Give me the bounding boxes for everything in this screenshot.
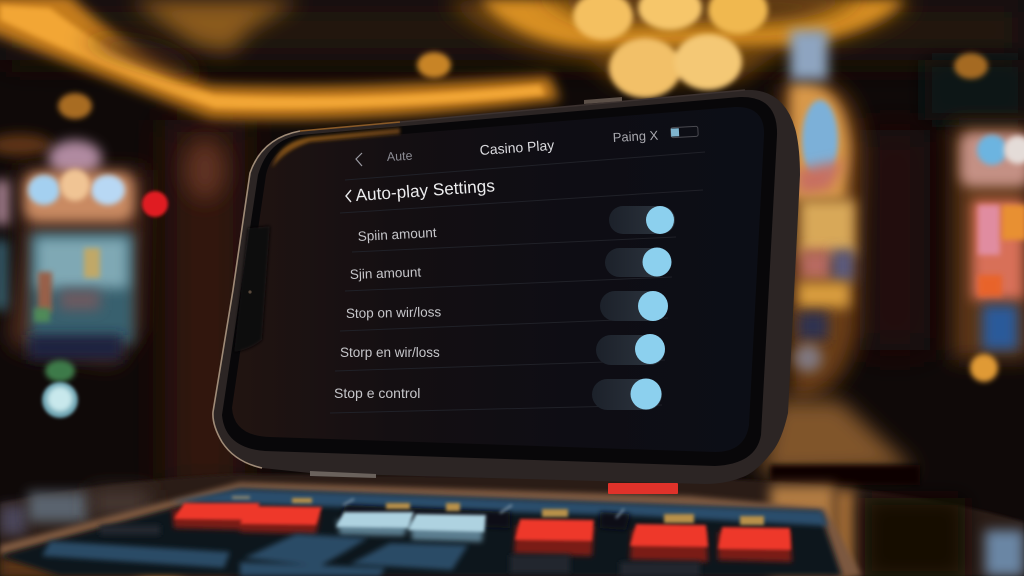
row 2: spin amount: Sjin amount	[350, 265, 422, 282]
row 5: stop control	[334, 378, 662, 410]
phone	[213, 90, 800, 494]
row 4: stop on win/loss: Storp en wir/loss	[340, 345, 440, 360]
row 4: stop on win/loss	[340, 334, 665, 365]
row 3: stop on win/loss: Stop on wir/loss	[346, 304, 442, 321]
status bar text	[356, 128, 659, 166]
ceiling gold band left	[0, 0, 560, 120]
keypad: red buttons	[172, 503, 792, 562]
ceiling gold chandelier	[450, 0, 915, 85]
keypad: faint dark labels	[100, 525, 700, 576]
table surface	[0, 474, 1024, 576]
phone body	[213, 90, 800, 484]
status bar text: Casino Play	[479, 137, 555, 158]
status bar text: Paing X	[612, 128, 659, 145]
slot machine left	[0, 140, 145, 365]
keypad: gold icons	[232, 496, 764, 525]
side ports and red button	[310, 471, 376, 478]
row 2: spin amount	[350, 248, 672, 282]
keypad: white buttons	[336, 512, 486, 542]
aisle floor	[760, 400, 915, 475]
row 3: stop on win/loss	[346, 291, 668, 321]
row 5: stop control: Stop e control	[334, 385, 420, 401]
keypad console	[0, 482, 862, 576]
screen corner glare	[272, 128, 400, 168]
keypad: light slash marks	[343, 499, 624, 518]
row 1: spin amount: Spiin amount	[357, 225, 437, 244]
status bar text: Aute	[386, 149, 413, 164]
inner black bezel	[222, 97, 777, 466]
ceiling lamps	[58, 52, 988, 119]
slot machine right of phone	[780, 30, 862, 400]
battery icon	[671, 126, 698, 138]
keypad: blue buttons	[42, 534, 468, 576]
divider lines	[330, 152, 705, 413]
notch	[234, 226, 270, 352]
slot machine far right	[952, 125, 1024, 360]
phone screen	[232, 107, 764, 452]
heading: Auto-play Settings	[355, 175, 495, 205]
row 1: spin amount	[357, 206, 675, 244]
